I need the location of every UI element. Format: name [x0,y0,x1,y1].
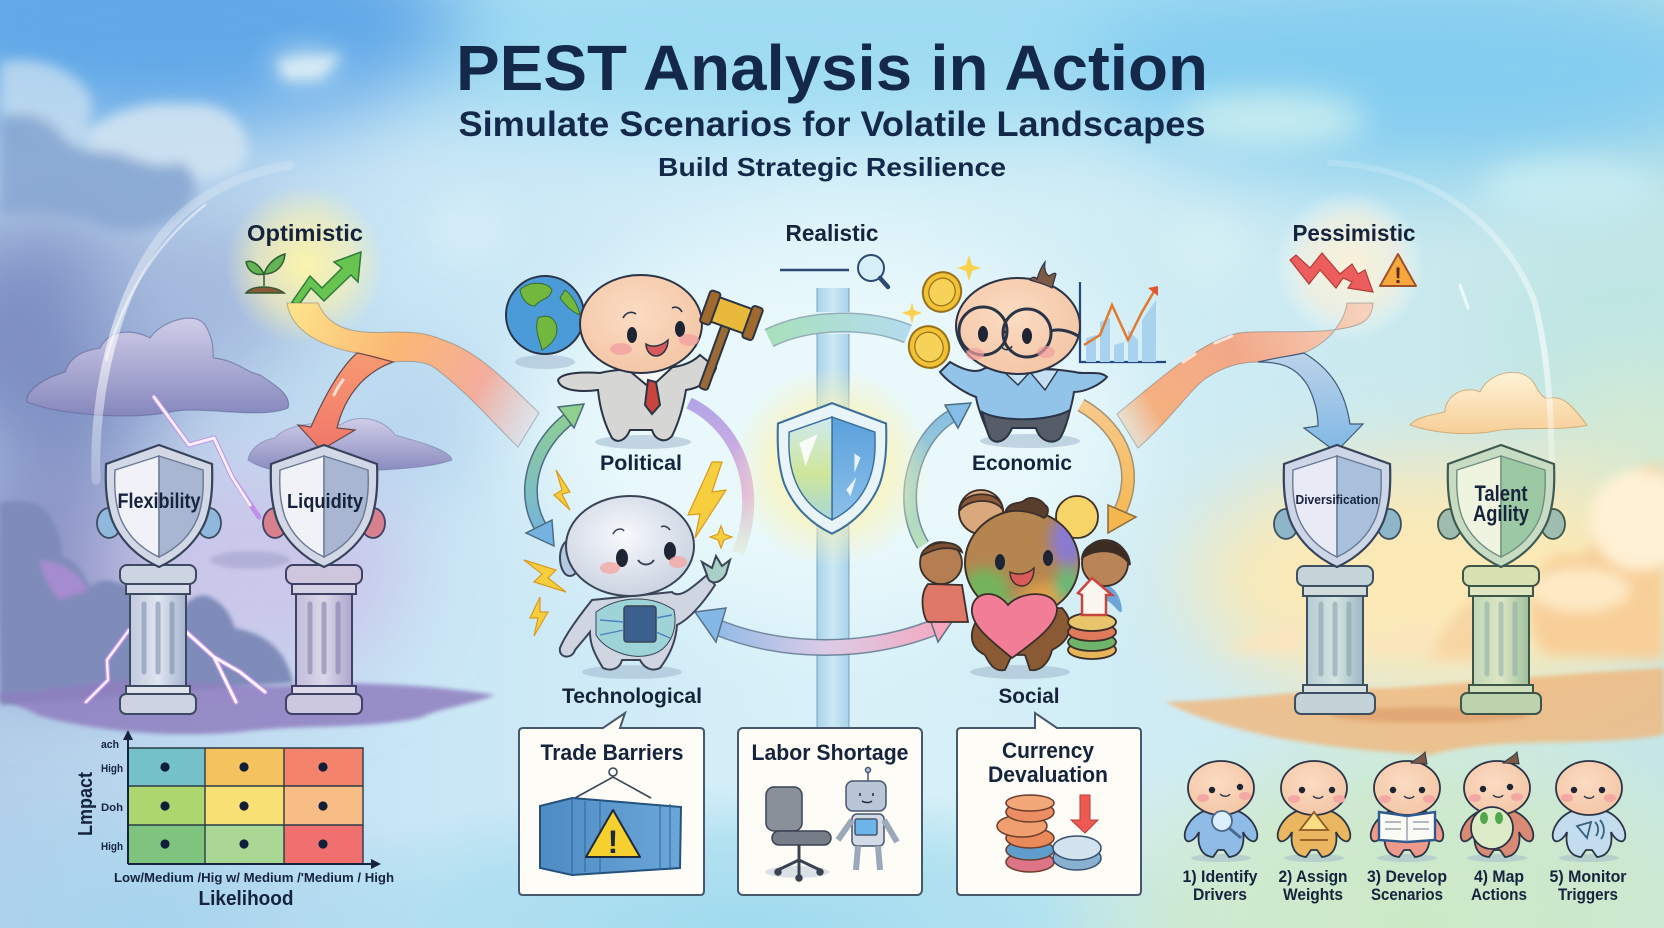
icon: home and coin stack [1068,578,1116,659]
protective dome arcs [96,163,1552,480]
risk matrix: Low/Medium /Hig w/ Medium /'Medium / High [114,870,394,885]
flow arrow: pessimistic path [1117,303,1373,452]
column [286,565,362,714]
hands [1438,509,1565,539]
step 5 monitor triggers [1553,761,1625,862]
step 4 map actions [1461,752,1533,862]
pillar: liquidity: Liquidity [287,491,364,513]
storm cloud lower [248,418,452,474]
central shield [732,367,932,567]
step labels: Drivers [1193,885,1247,904]
pillar: diversification: Diversification [1296,492,1379,507]
scenario: pessimistic: Pessimistic [1292,220,1416,246]
step labels: Weights [1283,885,1343,904]
lightning bolts [86,397,265,702]
risk matrix [75,730,394,910]
tagline: Build Strategic Resilience [658,152,1006,182]
icon: globe [506,276,584,369]
risk matrix: High [101,763,123,775]
pillar: flexibility [97,445,221,714]
step labels: 5) Monitor [1550,867,1627,886]
bottom washes [250,640,1250,928]
step labels [1182,867,1627,904]
icon: down arrow [1071,795,1098,833]
body [940,362,1107,442]
warm clouds right [1222,372,1664,660]
column [1295,566,1375,714]
callout: currency devaluation: Currency [1002,738,1095,763]
head [956,278,1080,374]
head [560,540,580,576]
shield [271,445,377,567]
icon: coins [902,255,981,374]
title: PEST Analysis in Action [456,32,1208,104]
hands [1274,509,1401,539]
icon: sparks [524,462,732,636]
scenario: optimistic: Optimistic [247,220,363,246]
step labels: 4) Map [1474,867,1524,886]
icon: sprout [246,254,285,293]
column [1461,566,1541,714]
character: social [920,490,1130,679]
icon: empty chair [765,787,831,881]
pillar: talent agility: Agility [1473,501,1530,526]
callout: labor shortage [738,728,922,895]
label: economic: Economic [972,452,1072,475]
callout: currency devaluation: Devaluation [988,762,1108,787]
callout: trade barriers: Trade Barriers [540,740,684,765]
icon: heart [972,594,1057,658]
step 1 identify drivers [1185,761,1257,862]
icon: shipping container [540,768,681,875]
center column [810,288,856,728]
pillar: flexibility: Flexibility [118,490,201,513]
icon: robot [838,768,897,870]
subtitle: Simulate Scenarios for Volatile Landscapes [458,105,1206,144]
scenario: pessimistic [1275,190,1425,340]
callout: labor shortage: Labor Shortage [752,740,908,765]
arrow: political to economic [769,322,908,338]
icon: growth chart [1080,282,1166,362]
shield [1448,445,1554,567]
icon: gavel [678,290,764,399]
hands [97,508,221,538]
body [560,575,715,670]
label: social: Social [998,685,1060,708]
right ground [1165,668,1664,755]
callout: currency devaluation [957,713,1141,895]
label: political: Political [600,452,682,475]
label: technological: Technological [562,685,702,708]
shield [1284,445,1390,567]
arrow: social to economic [910,403,971,545]
pillar: diversification [1274,445,1401,714]
storm cloud behind pillars [0,501,293,705]
step labels: Actions [1471,885,1527,904]
head [965,510,1079,616]
pillar: talent agility [1438,445,1565,714]
step labels: 3) Develop [1367,867,1447,886]
pillar: liquidity [263,445,385,714]
icon: magnifier [858,255,888,287]
icon: community [920,490,1130,622]
icon: falling arrow [1290,253,1373,292]
step labels: Scenarios [1371,885,1443,904]
body [558,355,716,441]
storm cloud upper [27,318,289,416]
callout: trade barriers [519,713,704,895]
step labels: 2) Assign [1278,867,1348,886]
step labels: Triggers [1558,885,1618,904]
step labels: 1) Identify [1182,867,1258,886]
process steps [1185,752,1625,862]
icon: warning triangle [1380,254,1416,288]
hands [263,508,385,538]
character: technological [524,462,732,679]
character: economic [902,255,1166,448]
risk matrix: High [101,841,123,853]
scenario: realistic: Realistic [786,220,879,246]
arrow: technological to social [695,608,958,648]
risk matrix: Doh [101,802,123,814]
arrow: economic to social [1081,405,1136,533]
arrow: political to technological [526,404,584,546]
step 2 assign weights [1278,761,1350,862]
icon: coin stack [997,795,1101,872]
risk matrix: ach [101,739,119,751]
scenario: realistic [780,220,888,287]
icon: shipping container: ! [608,824,618,860]
risk matrix: Lmpact [75,772,97,836]
column [120,565,196,714]
flow arrow: optimistic path [287,303,539,450]
head [580,275,702,373]
character: political [506,275,764,449]
left ground [0,680,495,734]
risk matrix: Likelihood [198,888,294,910]
icon: warning triangle: ! [1394,263,1402,288]
icon: rising arrow [292,252,361,306]
step 3 develop scenarios [1371,752,1443,862]
arrow: rainbow arc [689,403,748,553]
scenario: optimistic [225,185,385,345]
shield [106,445,212,567]
body [972,608,1070,670]
cycle arrows [526,322,1136,648]
pillar: talent agility: Talent [1474,481,1528,506]
